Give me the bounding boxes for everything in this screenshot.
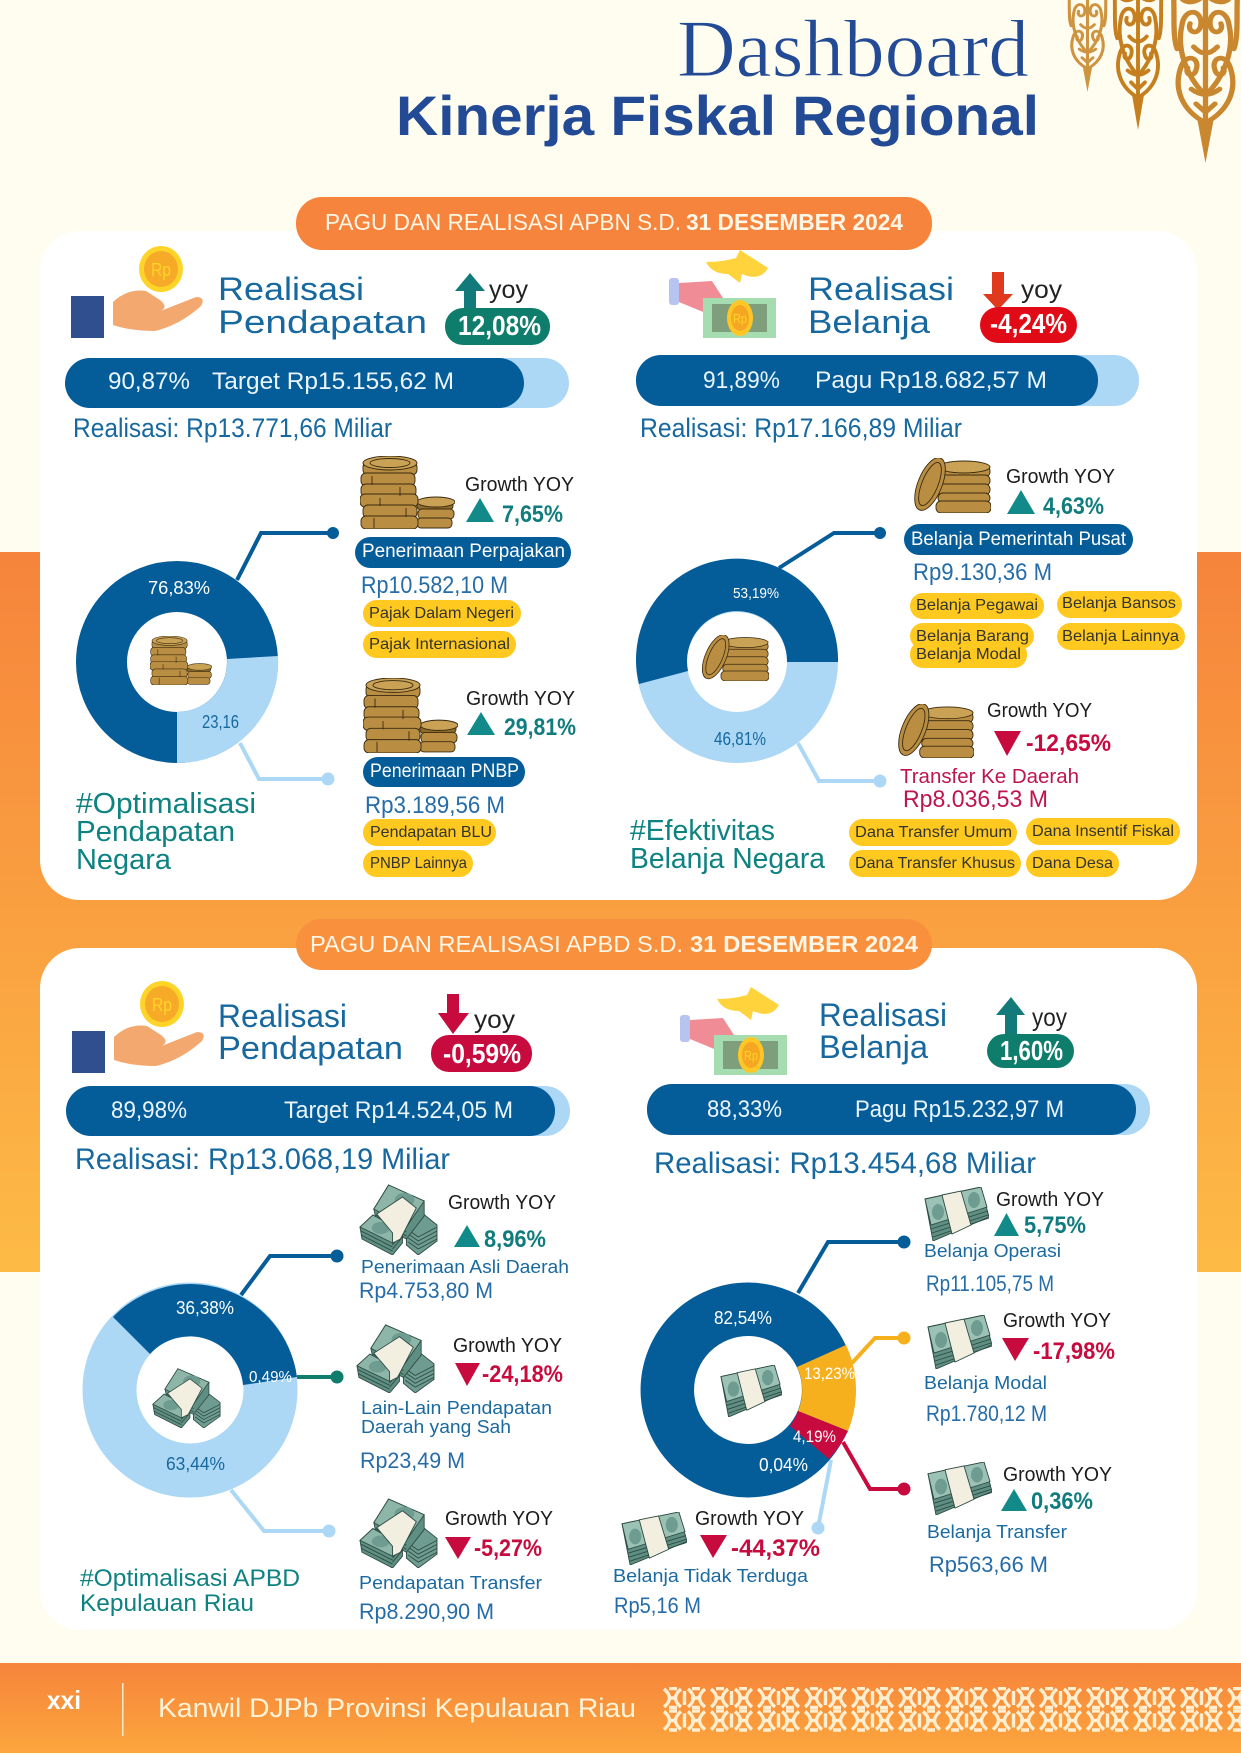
block: belanja transfer: Growth YOY (1003, 1464, 1112, 1486)
hashtag: optimalisasi APBD (80, 1565, 300, 1617)
block: pendapatan transfer (359, 1499, 553, 1624)
donut chart: pendapatan APBN: 23,16 (202, 712, 239, 732)
progress bar: target pendapatan: 90,87% (108, 368, 190, 395)
block: belanja pemerintah pusat: Belanja Barang (916, 628, 1029, 645)
block: penerimaan asli daerah (359, 1185, 569, 1303)
icon: hand with coin (71, 246, 203, 338)
progress bar: pagu belanja (636, 355, 1139, 406)
donut chart: pendapatan APBD: 63,44% (166, 1454, 225, 1474)
block: penerimaan PNBP: Growth YOY (466, 688, 575, 710)
text: realisasi belanja: Realisasi: Rp13.454,68 Miliar (654, 1147, 1036, 1180)
text: realisasi pendapatan: Realisasi: Rp13.771,66 Miliar (73, 413, 392, 443)
connector: transfer (231, 1490, 334, 1536)
yoy indicator up 12,08%: 12,08% (458, 310, 541, 341)
heading: Realisasi Belanja (819, 997, 947, 1065)
block: belanja pemerintah pusat: Belanja Pemerintah Pusat (911, 529, 1127, 550)
block: penerimaan perpajakan: Growth YOY (465, 474, 574, 496)
heading: Realisasi Pendapatan: Pendapatan (218, 1030, 403, 1066)
yoy indicator down -0,59%: yoy (474, 1006, 516, 1034)
hashtag: optimalisasi pendapatan: #Optimalisasi (76, 788, 256, 820)
progress bar: pagu belanja (647, 1084, 1150, 1135)
connector: belanja transfer (843, 1442, 909, 1494)
yoy indicator down -0,59%: -0,59% (443, 1038, 521, 1069)
block: penerimaan PNBP: 29,81% (504, 714, 576, 741)
title (396, 3, 1039, 147)
icon: hand paying money (669, 250, 776, 338)
yoy indicator up 1,60%: 1,60% (1000, 1035, 1063, 1066)
icon: hand with coin (72, 981, 204, 1073)
block: belanja transfer: Belanja Transfer (927, 1522, 1067, 1542)
block: penerimaan asli daerah: Growth YOY (448, 1192, 556, 1214)
progress bar: pagu belanja: 88,33% (707, 1096, 782, 1123)
donut chart: belanja APBD (667, 1308, 856, 1475)
yoy indicator up 1,60% (987, 997, 1074, 1068)
block: penerimaan PNBP (363, 678, 576, 877)
yoy indicator down -4,24%: -4,24% (990, 308, 1067, 339)
block: lain-lain pendapatan: Lain-Lain Pendapatan (361, 1398, 552, 1418)
heading pill: APBD (296, 919, 932, 970)
progress bar: target pendapatan (66, 1086, 570, 1136)
connector: belanja tidak terduga (813, 1460, 831, 1533)
yoy indicator up 1,60%: yoy (1032, 1004, 1067, 1032)
footer text: Kanwil DJPb Provinsi Kepulauan Riau (158, 1693, 636, 1723)
progress bar: pagu belanja: Pagu Rp18.682,57 M (815, 367, 1047, 394)
connector: belanja operasi (798, 1237, 909, 1293)
donut chart: belanja APBD: 13,23% (804, 1364, 855, 1383)
hashtag: efektivitas belanja: Belanja Negara (630, 843, 826, 875)
connector: PNBP (240, 743, 333, 784)
block: belanja tidak terduga: Growth YOY (695, 1508, 804, 1530)
block: belanja tidak terduga: -44,37% (731, 1535, 820, 1562)
heading pill: APBN: PAGU DAN REALISASI APBN S.D. (325, 209, 681, 235)
panel: APBN (40, 197, 1197, 900)
block: lain-lain pendapatan: Growth YOY (453, 1335, 562, 1357)
heading: Realisasi Belanja (808, 271, 954, 340)
block: belanja tidak terduga: Belanja Tidak Terduga (613, 1566, 809, 1586)
heading: Realisasi Pendapatan (218, 998, 403, 1066)
block: penerimaan PNBP: PNBP Lainnya (370, 855, 467, 872)
donut chart: belanja APBD: 0,04% (759, 1455, 808, 1475)
block: belanja modal (924, 1310, 1115, 1426)
hashtag: optimalisasi APBD: #Optimalisasi APBD (80, 1565, 300, 1592)
connector: perpajakan (237, 528, 338, 580)
block: transfer ke daerah: Dana Desa (1032, 855, 1113, 872)
donut chart: belanja APBD: 4,19% (793, 1427, 836, 1446)
block: belanja pemerintah pusat: Belanja Pegawai (916, 597, 1038, 614)
block: belanja pemerintah pusat: Rp9.130,36 M (913, 559, 1052, 586)
block: penerimaan PNBP: Penerimaan PNBP (370, 761, 519, 782)
panel: APBD (40, 919, 1197, 1630)
hashtag: efektivitas belanja (630, 815, 826, 875)
connector: PAD (241, 1251, 342, 1295)
ornament: hanging gold vines (1069, 0, 1237, 163)
block: transfer ke daerah: Dana Insentif Fiskal (1032, 823, 1174, 840)
block: belanja transfer: Rp563,66 M (929, 1552, 1048, 1577)
block: penerimaan PNBP: Rp3.189,56 M (365, 792, 505, 819)
batik pattern (661, 1687, 1241, 1732)
block: transfer ke daerah: Dana Transfer Umum (855, 824, 1012, 841)
heading pill: APBN (296, 197, 932, 250)
heading: Realisasi Belanja: Realisasi (819, 997, 947, 1033)
yoy indicator up 12,08%: yoy (489, 276, 528, 304)
connector: belanja modal (852, 1333, 909, 1363)
block: transfer ke daerah (849, 700, 1180, 877)
hashtag: optimalisasi APBD: Kepulauan Riau (80, 1590, 254, 1617)
block: penerimaan asli daerah: 8,96% (484, 1226, 546, 1253)
block: penerimaan perpajakan: Pajak Dalam Negeri (369, 605, 514, 622)
heading: Realisasi Belanja: Belanja (808, 304, 930, 340)
block: belanja operasi: 5,75% (1024, 1212, 1086, 1239)
block: belanja operasi: Rp11.105,75 M (926, 1271, 1054, 1296)
block: belanja operasi (924, 1187, 1104, 1296)
block: penerimaan perpajakan: Pajak Internasional (369, 636, 510, 653)
block: belanja transfer (927, 1462, 1112, 1577)
block: pendapatan transfer: Rp8.290,90 M (359, 1599, 494, 1624)
block: belanja pemerintah pusat: Growth YOY (1006, 466, 1115, 488)
block: lain-lain pendapatan: -24,18% (482, 1361, 563, 1388)
block: belanja modal: Growth YOY (1003, 1310, 1111, 1332)
donut chart: belanja APBN: 46,81% (714, 729, 766, 749)
yoy indicator down -0,59% (431, 994, 532, 1072)
donut chart: belanja APBN (636, 559, 838, 749)
block: penerimaan perpajakan: Penerimaan Perpajakan (362, 541, 565, 562)
block: penerimaan PNBP: Pendapatan BLU (370, 824, 492, 841)
heading pill: APBD: 31 DESEMBER 2024 (690, 931, 918, 957)
hashtag: optimalisasi pendapatan (76, 788, 256, 876)
block: penerimaan asli daerah: Penerimaan Asli Daerah (361, 1257, 569, 1277)
block: belanja pemerintah pusat (904, 454, 1185, 668)
progress bar: target pendapatan (65, 358, 569, 408)
block: lain-lain pendapatan: Rp23,49 M (360, 1448, 465, 1473)
heading pill: APBN: 31 DESEMBER 2024 (686, 209, 903, 235)
yoy indicator up 12,08% (445, 273, 550, 345)
connector: pemerintah pusat (779, 528, 885, 568)
block: transfer ke daerah: -12,65% (1026, 730, 1111, 757)
block: transfer ke daerah: Transfer Ke Daerah (900, 766, 1079, 788)
block: lain-lain pendapatan (357, 1325, 563, 1473)
block: belanja pemerintah pusat: Belanja Bansos (1062, 595, 1176, 612)
donut chart: belanja APBD: 82,54% (714, 1308, 772, 1328)
heading: Realisasi Pendapatan (218, 271, 427, 340)
footer (0, 1663, 1241, 1753)
title: Dashboard (677, 3, 1029, 94)
text: realisasi pendapatan: Realisasi: Rp13.068,19 Miliar (75, 1143, 450, 1176)
block: belanja pemerintah pusat: Belanja Lainnya (1062, 628, 1179, 645)
progress bar: target pendapatan: 89,98% (111, 1097, 187, 1124)
progress bar: pagu belanja: 91,89% (703, 367, 780, 394)
donut chart: pendapatan APBD (110, 1284, 297, 1474)
connector: transfer ke daerah (798, 743, 885, 786)
progress bar: pagu belanja: Pagu Rp15.232,97 M (855, 1096, 1064, 1123)
block: belanja pemerintah pusat: Belanja Modal (916, 646, 1021, 663)
progress bar: target pendapatan: Target Rp15.155,62 M (212, 368, 454, 395)
block: penerimaan asli daerah: Rp4.753,80 M (359, 1278, 493, 1303)
progress bar: target pendapatan: Target Rp14.524,05 M (284, 1097, 513, 1124)
yoy indicator down -4,24% (980, 272, 1077, 343)
heading: Realisasi Belanja: Belanja (819, 1029, 928, 1065)
heading pill: APBD: PAGU DAN REALISASI APBD S.D. (310, 931, 683, 957)
donut chart: pendapatan APBD: 0,49% (249, 1369, 292, 1386)
hashtag: optimalisasi pendapatan: Pendapatan (76, 816, 235, 848)
page number: xxi (47, 1685, 81, 1715)
block: belanja operasi: Growth YOY (996, 1189, 1104, 1211)
heading: Realisasi Pendapatan: Pendapatan (218, 304, 427, 340)
heading: Realisasi Pendapatan: Realisasi (218, 271, 364, 307)
donut chart: pendapatan APBN: 76,83% (148, 578, 210, 598)
block: belanja modal: Belanja Modal (924, 1373, 1047, 1393)
block: penerimaan perpajakan (355, 456, 574, 658)
block: transfer ke daerah: Dana Transfer Khusus (855, 855, 1015, 872)
block: belanja pemerintah pusat: 4,63% (1043, 493, 1104, 520)
block: belanja tidak terduga (613, 1508, 820, 1618)
hashtag: efektivitas belanja: #Efektivitas (630, 815, 775, 847)
block: pendapatan transfer: -5,27% (474, 1535, 542, 1562)
block: belanja transfer: 0,36% (1031, 1488, 1093, 1515)
connector: lain-lain (297, 1372, 342, 1382)
block: transfer ke daerah: Rp8.036,53 M (903, 786, 1048, 813)
text: realisasi belanja: Realisasi: Rp17.166,89 Miliar (640, 413, 962, 443)
heading: Realisasi Pendapatan: Realisasi (218, 998, 347, 1034)
block: penerimaan perpajakan: Rp10.582,10 M (361, 572, 508, 599)
block: lain-lain pendapatan: Daerah yang Sah (361, 1417, 511, 1437)
hashtag: optimalisasi pendapatan: Negara (76, 844, 172, 876)
block: transfer ke daerah: Growth YOY (987, 700, 1092, 722)
block: belanja modal: Rp1.780,12 M (926, 1401, 1047, 1426)
block: belanja modal: -17,98% (1033, 1338, 1115, 1365)
block: pendapatan transfer: Growth YOY (445, 1508, 553, 1530)
donut chart: belanja APBN: 53,19% (733, 585, 779, 602)
block: pendapatan transfer: Pendapatan Transfer (359, 1573, 542, 1593)
yoy indicator down -4,24%: yoy (1021, 276, 1063, 304)
heading: Realisasi Belanja: Realisasi (808, 271, 954, 307)
block: penerimaan perpajakan: 7,65% (502, 501, 563, 528)
title: Kinerja Fiskal Regional (396, 84, 1039, 147)
icon: hand paying money (680, 987, 787, 1075)
block: belanja operasi: Belanja Operasi (924, 1241, 1061, 1261)
donut chart: pendapatan APBN (102, 578, 278, 763)
donut chart: pendapatan APBD: 36,38% (176, 1298, 234, 1318)
block: belanja tidak terduga: Rp5,16 M (614, 1593, 701, 1618)
